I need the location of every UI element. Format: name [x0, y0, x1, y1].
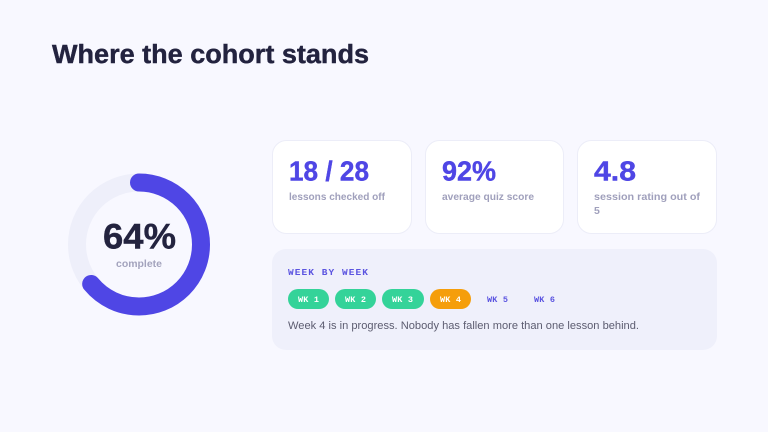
panel: session rating card: 4.8: [594, 156, 636, 186]
pill: week 2 done: WK 2: [345, 295, 366, 305]
pill: week 1 done: [288, 289, 329, 309]
label: week 5 upcoming: WK 5: [487, 295, 508, 305]
panel: quiz score card: [426, 140, 564, 234]
donut chart: 64% complete: [77, 182, 201, 306]
panel: quiz score card: 92%: [442, 156, 496, 186]
week by week heading: WEEK BY WEEK: [288, 267, 368, 278]
panel: week by week: [272, 249, 717, 350]
pill: week 4 in progress: WK 4: [440, 295, 461, 305]
pill: week 4 in progress: [430, 289, 471, 309]
panel: lessons card: [272, 140, 412, 234]
donut chart: 64% complete: complete: [116, 258, 162, 270]
panel: session rating card: 5: [594, 205, 600, 217]
pill: week 2 done: [335, 289, 376, 309]
pill: week 3 done: WK 3: [392, 295, 413, 305]
pill: week 1 done: WK 1: [298, 295, 319, 305]
panel: quiz score card: average quiz score: [442, 191, 534, 203]
panel: session rating card: [578, 140, 716, 234]
panel: lessons card: 18 / 28: [289, 156, 369, 186]
pill: week 3 done: [382, 289, 424, 309]
status note: Week 4 is in progress. Nobody has fallen more than one lesson behind.: [288, 320, 639, 332]
label: week 6 upcoming: WK 6: [534, 295, 555, 305]
panel: session rating card: session rating out of: [594, 191, 701, 203]
title: Where the cohort stands: [52, 41, 369, 69]
panel: lessons card: lessons checked off: [289, 191, 385, 203]
donut chart: 64% complete: 64%: [103, 218, 176, 256]
